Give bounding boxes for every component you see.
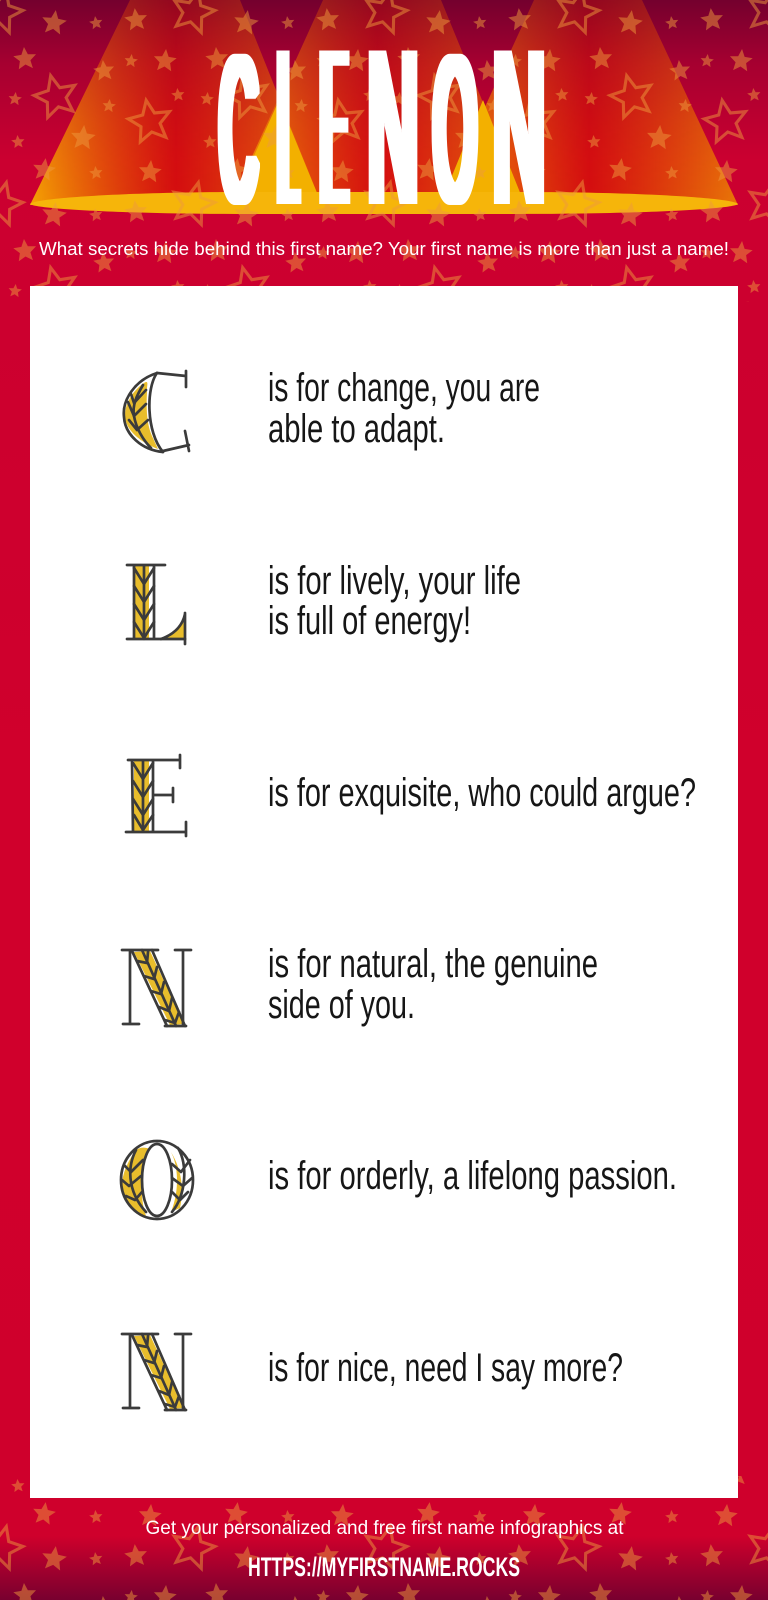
title straight letters xyxy=(279,0,545,253)
footer url: HTTPS://MYFIRSTNAME.ROCKS xyxy=(248,1552,520,1582)
icon: letter O xyxy=(121,1141,193,1219)
title round letters xyxy=(220,14,476,246)
spotlight cones xyxy=(30,0,738,205)
title round letters: C xyxy=(220,14,257,246)
text: N 2: is for nice, need I say more? xyxy=(268,1346,623,1390)
text: C: is for change, you are xyxy=(268,366,540,410)
title straight letters: L xyxy=(279,0,298,253)
star pattern top xyxy=(0,0,768,302)
text: N xyxy=(268,942,598,1027)
panel: letters xyxy=(30,286,738,1498)
row O xyxy=(121,1141,677,1219)
spotlight overlap left xyxy=(232,100,322,205)
text: C xyxy=(268,366,540,451)
icon: letter L xyxy=(127,565,185,644)
icon: letter N xyxy=(122,1334,191,1410)
spotlight floor ellipses xyxy=(30,192,738,214)
spotlight overlap right xyxy=(440,100,525,205)
icon: letter C xyxy=(124,371,189,452)
row E xyxy=(126,755,696,836)
text: L: is full of energy! xyxy=(268,599,471,643)
icon: letter E xyxy=(126,755,186,836)
subtitle: What secrets hide behind this first name? Your first name is more than just a name! xyxy=(39,239,729,259)
row N xyxy=(122,942,598,1027)
star pattern bottom xyxy=(0,1476,768,1600)
text: C: able to adapt. xyxy=(268,407,445,451)
text: L xyxy=(268,559,521,643)
title xyxy=(220,0,545,253)
row L xyxy=(127,559,521,644)
title: O xyxy=(434,14,476,246)
text: N: side of you. xyxy=(268,983,415,1027)
row C xyxy=(124,366,540,452)
footer line: Get your personalized and free first name infographics at xyxy=(146,1518,624,1539)
row N 2 xyxy=(122,1334,623,1410)
text: N: is for natural, the genuine xyxy=(268,942,598,986)
title straight letters: N xyxy=(368,0,418,253)
icon: letter N xyxy=(122,950,191,1026)
title straight letters: E xyxy=(321,0,347,253)
text: N xyxy=(493,0,545,253)
text: L: is for lively, your life xyxy=(268,559,521,603)
spotlights xyxy=(30,0,738,214)
